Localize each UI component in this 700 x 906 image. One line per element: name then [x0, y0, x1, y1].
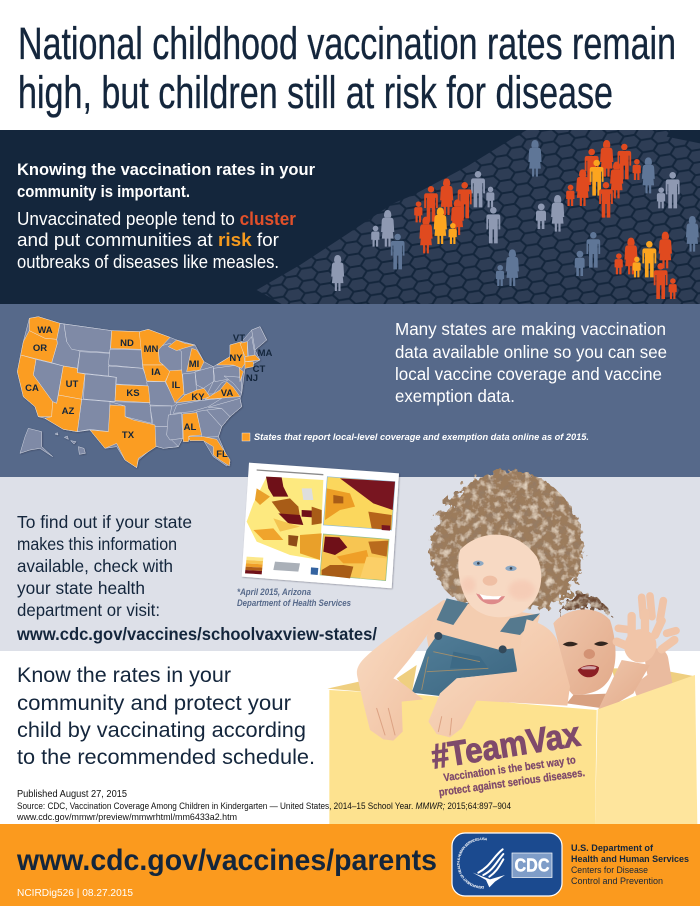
TeamVax label: #TeamVax [429, 715, 583, 777]
map state labels: KS [126, 388, 140, 399]
map state labels: KY [191, 392, 205, 403]
clustering text block [17, 160, 315, 272]
big child torso and arms [357, 598, 570, 741]
state data text block [395, 319, 667, 406]
find your state text block: To find out if your state [17, 512, 192, 532]
TeamVax label [429, 715, 586, 799]
map of United States [17, 317, 267, 468]
map state labels: OR [33, 343, 47, 354]
map state labels: MA [258, 348, 273, 359]
know the rates text block: Know the rates in your [17, 664, 231, 687]
big child hair [431, 471, 583, 609]
clustering text block: Unvaccinated people tend to cluster [17, 209, 296, 229]
map caption: *April 2015, Arizona [237, 587, 311, 598]
source text block [16, 789, 511, 822]
title [18, 18, 676, 118]
publication code: NCIRDig526 | 08.27.2015 [17, 888, 133, 899]
footer band [0, 824, 700, 906]
map state labels: CT [253, 364, 266, 375]
clustering text block: community is important. [17, 182, 190, 201]
TeamVax label: protect against serious diseases. [438, 767, 586, 799]
source text block: www.cdc.gov/mmwr/preview/mmwrhtml/mm6433a2.htm [16, 812, 237, 822]
state data text block: local vaccine coverage and vaccine [395, 364, 662, 384]
map state labels: FL [216, 449, 228, 460]
map state labels: CA [25, 383, 39, 394]
agency names [571, 843, 689, 886]
photo: two children in a box [327, 471, 697, 824]
map state labels [25, 325, 273, 460]
map state labels: IA [151, 367, 161, 378]
agency names: Health and Human Services [571, 854, 689, 864]
state data text block: data available online so you can see [395, 342, 667, 362]
panel: clustering of unvaccinated people [0, 130, 700, 304]
baby far arm and hand [618, 596, 676, 690]
know the rates text block: to the recommended schedule. [17, 746, 315, 769]
icon: CDC mark: CDC [514, 856, 550, 876]
find your state text block: www.cdc.gov/vaccines/schoolvaxview-states/ [16, 624, 377, 644]
find your state text block [16, 512, 377, 644]
clustering text block: Knowing the vaccination rates in your [17, 160, 315, 179]
Arizona vaccination map card [242, 463, 399, 588]
source text block: Published August 27, 2015 [17, 789, 127, 800]
find your state text block: makes this information [17, 534, 177, 554]
clustering text block: outbreaks of diseases like measles. [17, 252, 279, 272]
know the rates text block [17, 664, 315, 769]
baby [553, 593, 676, 709]
state data text block: exemption data. [395, 386, 515, 406]
map state labels: AL [184, 422, 197, 433]
find your state text block: department or visit: [17, 600, 160, 620]
agency names: Control and Prevention [571, 876, 663, 886]
agency names: U.S. Department of [571, 843, 654, 853]
map state labels: AZ [62, 406, 75, 417]
know the rates text block: community and protect your [17, 692, 291, 715]
state data text block: Many states are making vaccination [395, 319, 666, 339]
map state labels: ND [120, 338, 134, 349]
map state labels: NY [229, 353, 243, 364]
TeamVax label: Vaccination is the best way to [443, 754, 577, 784]
clustering text block: and put communities at risk for [17, 230, 279, 250]
map state labels: MN [144, 344, 159, 355]
panel: find your state [0, 463, 700, 651]
panel: know the rates [0, 651, 700, 824]
baby near arm and hand [598, 660, 650, 709]
agency names: Centers for Disease [571, 865, 648, 875]
map state labels: NJ [246, 373, 258, 384]
map state labels: VA [221, 388, 233, 399]
people and hexagon illustration [257, 130, 700, 304]
map state labels: WA [37, 325, 53, 336]
source text block: Source: CDC, Vaccination Coverage Among Children in Kindergarten — United States, 2014–15 School Year. MMWR; 2015;64:897–904 [17, 801, 511, 811]
find your state text block: your state health [17, 578, 145, 598]
box back flaps [327, 665, 693, 694]
map state labels: VT [233, 333, 245, 344]
panel: state data online [0, 304, 700, 477]
map state labels: TX [122, 430, 135, 441]
map legend: States that report local-level coverage and exemption data online as of 2015. [254, 432, 589, 442]
footer URL: www.cdc.gov/vaccines/parents [16, 844, 437, 877]
HHS and CDC logo [451, 832, 563, 897]
map caption [237, 587, 351, 609]
icon: HHS eagle: DEPARTMENT OF HEALTH & HUMAN SERVICES USA [457, 838, 487, 889]
map state labels: MI [189, 359, 199, 370]
map state labels: IL [172, 380, 180, 391]
box [329, 675, 697, 824]
big child face [458, 535, 541, 617]
know the rates text block: child by vaccinating according [17, 719, 306, 742]
map state labels: UT [66, 379, 79, 390]
find your state text block: available, check with [17, 556, 173, 576]
map caption: Department of Health Services [237, 598, 351, 609]
